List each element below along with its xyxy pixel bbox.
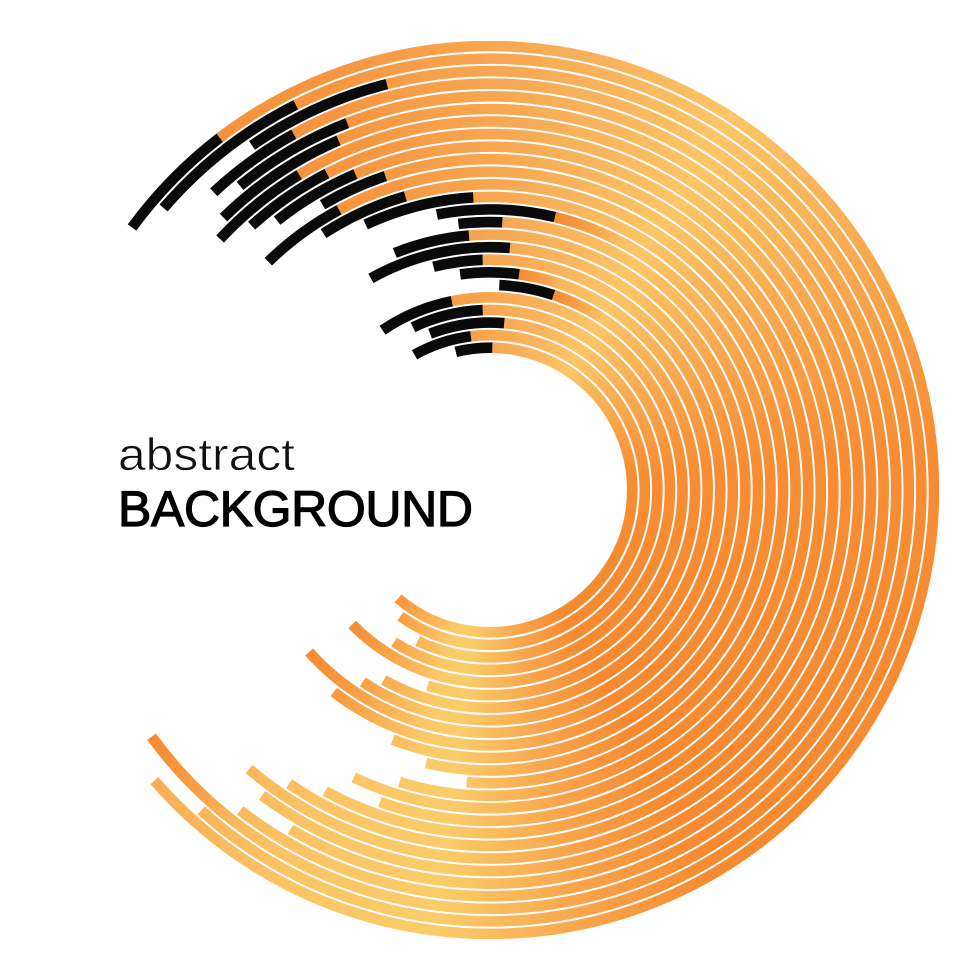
black ring segments at upper left [132,84,555,355]
title: BACKGROUND: BACKGROUND [118,481,473,537]
deep orange highlights on individual rings [152,217,625,826]
orange gradient concentric rings [147,41,939,939]
title: abstract: abstract [118,429,296,480]
